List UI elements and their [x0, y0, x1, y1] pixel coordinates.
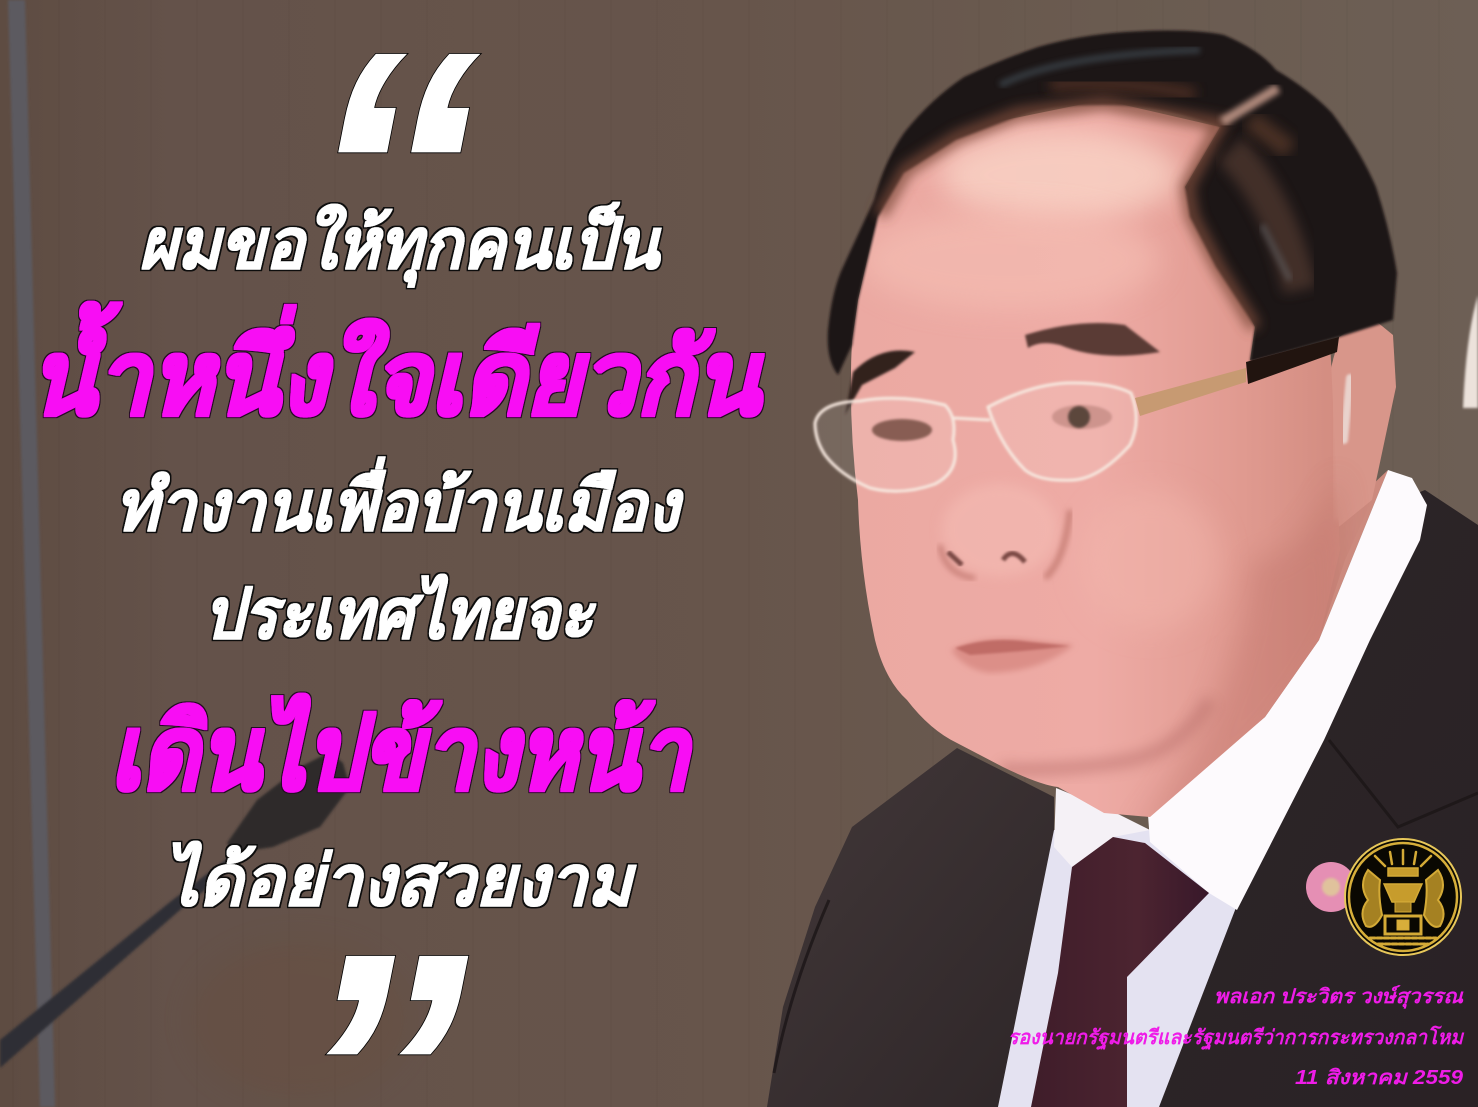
hairline fringe [880, 103, 1255, 328]
hair part and sheen [1000, 50, 1300, 290]
left shirt collar [1054, 788, 1150, 867]
government seal [1345, 839, 1461, 955]
quote line 4: ประเทศไทยจะ [204, 574, 596, 653]
ear blend [1334, 360, 1340, 520]
quote highlight line 2: น้ำหนึ่งใจเดียวกัน [30, 302, 764, 437]
suit seams [774, 740, 1478, 1073]
quote line 3: ทำงานเพื่อบ้านเมือง [115, 456, 684, 545]
lapel pin [1306, 862, 1356, 912]
right suit jacket [1159, 490, 1478, 1107]
necktie [1031, 837, 1209, 1107]
right edge highlight [1463, 295, 1478, 408]
caption: name: พลเอก ประวิตร วงษ์สุวรรณ [1214, 985, 1465, 1009]
shirt front [998, 830, 1237, 1107]
caption: date: 11 สิงหาคม 2559 [1295, 1067, 1464, 1089]
caption: position: รองนายกรัฐมนตรีและรัฐมนตรีว่าการกระทรวงกลาโหม [1008, 1025, 1465, 1051]
face [851, 100, 1340, 817]
quote highlight line 5: เดินไปข้างหน้า [110, 693, 693, 812]
right shirt collar [1148, 470, 1427, 910]
background pole [8, 0, 55, 1107]
glasses [815, 383, 1136, 491]
hearing aid [1344, 378, 1350, 440]
left suit shoulder [767, 748, 1054, 1107]
ear [1315, 317, 1396, 530]
mouth [951, 638, 1074, 673]
hair [828, 31, 1397, 375]
portrait [767, 31, 1478, 1107]
quote line 6: ได้อย่างสวยงาม [164, 841, 637, 920]
seal emblem [1362, 850, 1444, 944]
microphone [0, 752, 350, 1068]
quote line 1: ผมขอให้ทุกคนเป็น [139, 202, 662, 288]
glasses temple [1135, 337, 1339, 416]
eyes [872, 405, 1112, 441]
neck [1100, 470, 1388, 817]
face shading [860, 130, 1345, 840]
eyebrows [845, 323, 1160, 415]
nose [940, 484, 1070, 578]
